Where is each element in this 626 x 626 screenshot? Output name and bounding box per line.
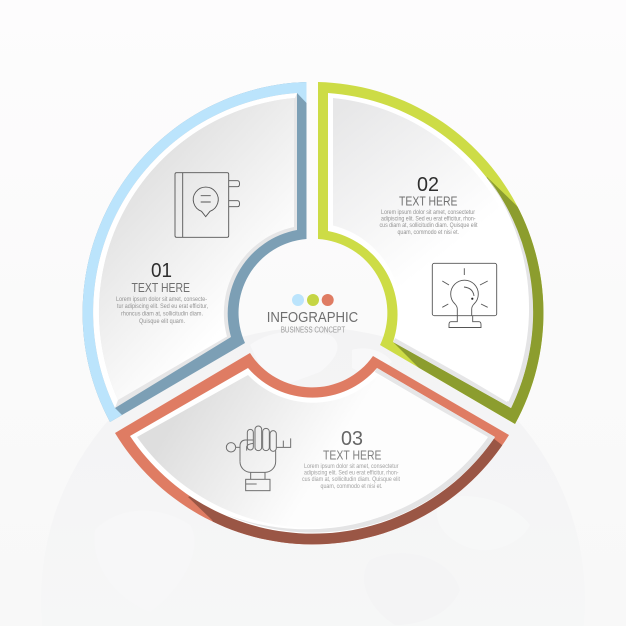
segment 03 inner white [130, 368, 495, 534]
heading: text here 01: TEXT HERE [132, 280, 190, 295]
segment 01 white rim [93, 93, 297, 408]
body text 01: tur adipiscing elit. Sed eu erat efficitur, [117, 303, 208, 310]
body text 03: quam, commodo et nisi et. [320, 483, 383, 490]
icon: monitor with light bulb [432, 263, 497, 328]
segment 03 gradient panel [137, 375, 488, 528]
body text 02 [380, 209, 478, 236]
panel: segment 02 [318, 82, 544, 424]
segment 01 light blue arc [83, 82, 307, 422]
segment 02 dark fold [393, 177, 544, 424]
icon: hand holding key [226, 426, 291, 491]
body text 03: cus diam at, sollicitudin diam. Quisque elit [302, 476, 400, 483]
body text 02: cus diam at, sollicitudin diam. Quisque elit [380, 222, 478, 229]
segment 02 gradient panel [333, 98, 527, 402]
body text 03: Lorem ipsum dolor sit amet, consectetur [304, 463, 398, 470]
panel: segment 01 [83, 82, 307, 422]
body text 03 [302, 463, 400, 490]
body text 02: adipiscing elit. Sed eu erat efficitur, rhon- [381, 216, 476, 222]
segment 03 orange frame [115, 353, 509, 544]
body text 03: adipiscing elit. Sed eu erat efficitur, rhon- [304, 470, 398, 476]
number 01: 01 [151, 259, 172, 282]
number 03: 03 [341, 427, 363, 450]
segment 01 gradient panel [99, 98, 294, 400]
body text 01: rhoncus diam at, sollicitudin diam. [121, 310, 203, 317]
body text 01: Lorem ipsum dolor sit amet, consecte- [116, 296, 207, 303]
segment 03 dark fold [188, 438, 502, 544]
business concept subtitle: BUSINESS CONCEPT [281, 325, 345, 334]
infographic title: INFOGRAPHIC [267, 309, 358, 326]
globe backdrop [41, 327, 585, 626]
segment 01 dark frame [83, 82, 307, 422]
body text 01: Quisque elit quam. [139, 318, 185, 325]
heading: text here 03: TEXT HERE [323, 447, 382, 462]
panel: segment 03 [115, 353, 509, 544]
segment 03 inner edge on upper right side [377, 368, 495, 437]
body text 01 [116, 296, 208, 325]
icon: address book with speech bubble [175, 173, 240, 237]
segment 01 inner edge [93, 93, 297, 408]
number 02: 02 [417, 173, 439, 196]
segment 03 inner edge on outer arc [225, 436, 495, 533]
body text 02: Lorem ipsum dolor sit amet, consectetur [381, 209, 475, 216]
heading: text here 02: TEXT HERE [399, 193, 458, 208]
center title block [267, 294, 358, 334]
body text 02: quam, commodo et nisi et. [398, 229, 459, 236]
segment 02 inner edge on outer arc [487, 177, 533, 408]
segment 02 light green frame [318, 82, 543, 424]
segment 02 inner white [328, 93, 533, 408]
segment 02 inner edge on lower side [393, 342, 511, 408]
colour dots [292, 294, 334, 306]
